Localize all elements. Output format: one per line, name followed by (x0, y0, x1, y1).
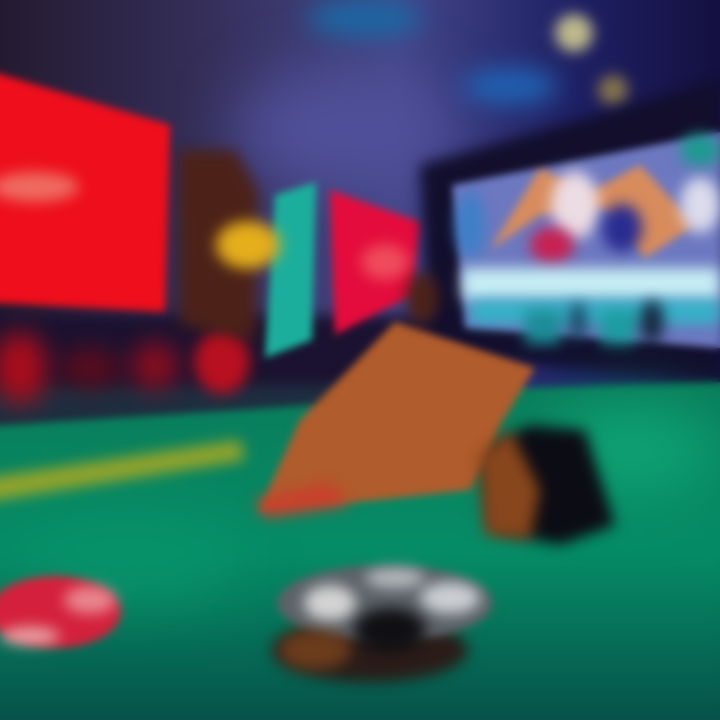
yellow table line (0, 440, 245, 506)
right colourful screen (452, 132, 720, 348)
green table (0, 382, 720, 720)
teal pillar (265, 182, 316, 358)
dark card pile (480, 425, 615, 545)
brown column (178, 150, 258, 340)
black and white poker chips (272, 565, 493, 682)
brown cards (255, 272, 540, 540)
pink red screen (330, 190, 420, 335)
red poker chips (0, 576, 121, 648)
right screen frame (420, 80, 720, 382)
yellow light (216, 221, 280, 269)
ceiling lights (307, 0, 628, 105)
red seats row and dark floor band (0, 315, 460, 430)
background wall (0, 0, 720, 450)
red screen left (0, 62, 170, 312)
